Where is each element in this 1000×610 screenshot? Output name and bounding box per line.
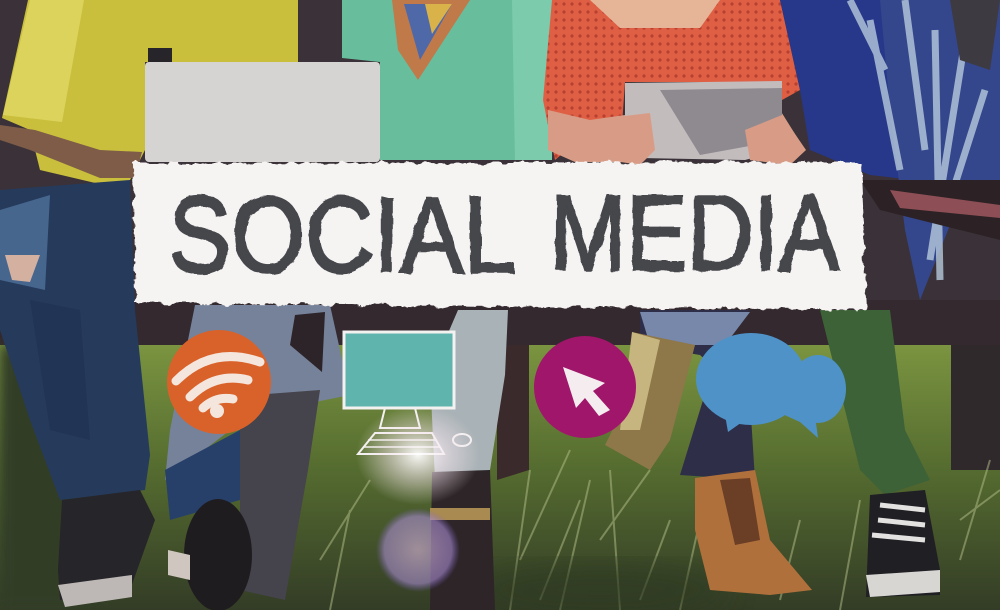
bench post [497, 345, 529, 480]
icon: cursor on magenta circle [534, 336, 636, 438]
title: SOCIAL MEDIA [168, 172, 840, 295]
jeans [0, 180, 150, 500]
person 3 legs and boots [430, 310, 508, 610]
laptop [145, 62, 380, 162]
tablet [608, 81, 806, 165]
grass field [0, 345, 1000, 610]
icon: blue speech bubbles [696, 333, 846, 438]
title: SOCIAL MEDIA: MEDIA [550, 172, 840, 293]
person 2 legs: ripped jeans and tall boot [165, 305, 350, 610]
person 3 orange top [543, 0, 805, 165]
person 2 green cardigan [342, 0, 553, 160]
icon: desktop computer [344, 332, 471, 454]
person 4 blue shirt and green trousers [780, 0, 1000, 597]
icon: wifi on orange circle [167, 330, 271, 434]
person 3 crossed legs and boots [605, 310, 812, 595]
lens flare [356, 405, 480, 592]
sneaker [58, 490, 155, 600]
title: SOCIAL MEDIA: SOCIAL [168, 174, 516, 295]
person 1: yellow shirt [0, 0, 298, 607]
banner: white brush stroke [133, 162, 867, 310]
